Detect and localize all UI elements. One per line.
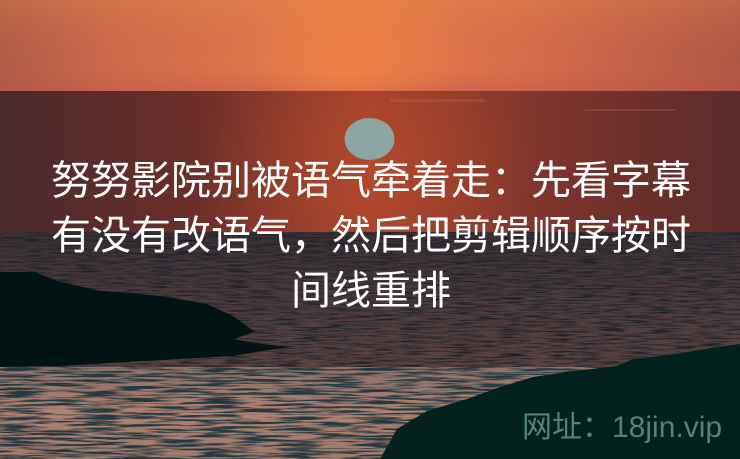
title: 间线重排 (291, 269, 451, 313)
sky (0, 0, 740, 92)
sun (344, 118, 394, 160)
title: 有没有改语气，然后把剪辑顺序按时 (51, 214, 691, 258)
title: 努努影院别被语气牵着走：先看字幕 (51, 159, 691, 203)
left island silhouette (0, 272, 290, 367)
sea (0, 232, 740, 459)
dark horizon band (0, 91, 740, 233)
right headland silhouette (380, 344, 740, 459)
watermark: 网址：18jin.vip (522, 411, 722, 444)
title (51, 159, 691, 313)
